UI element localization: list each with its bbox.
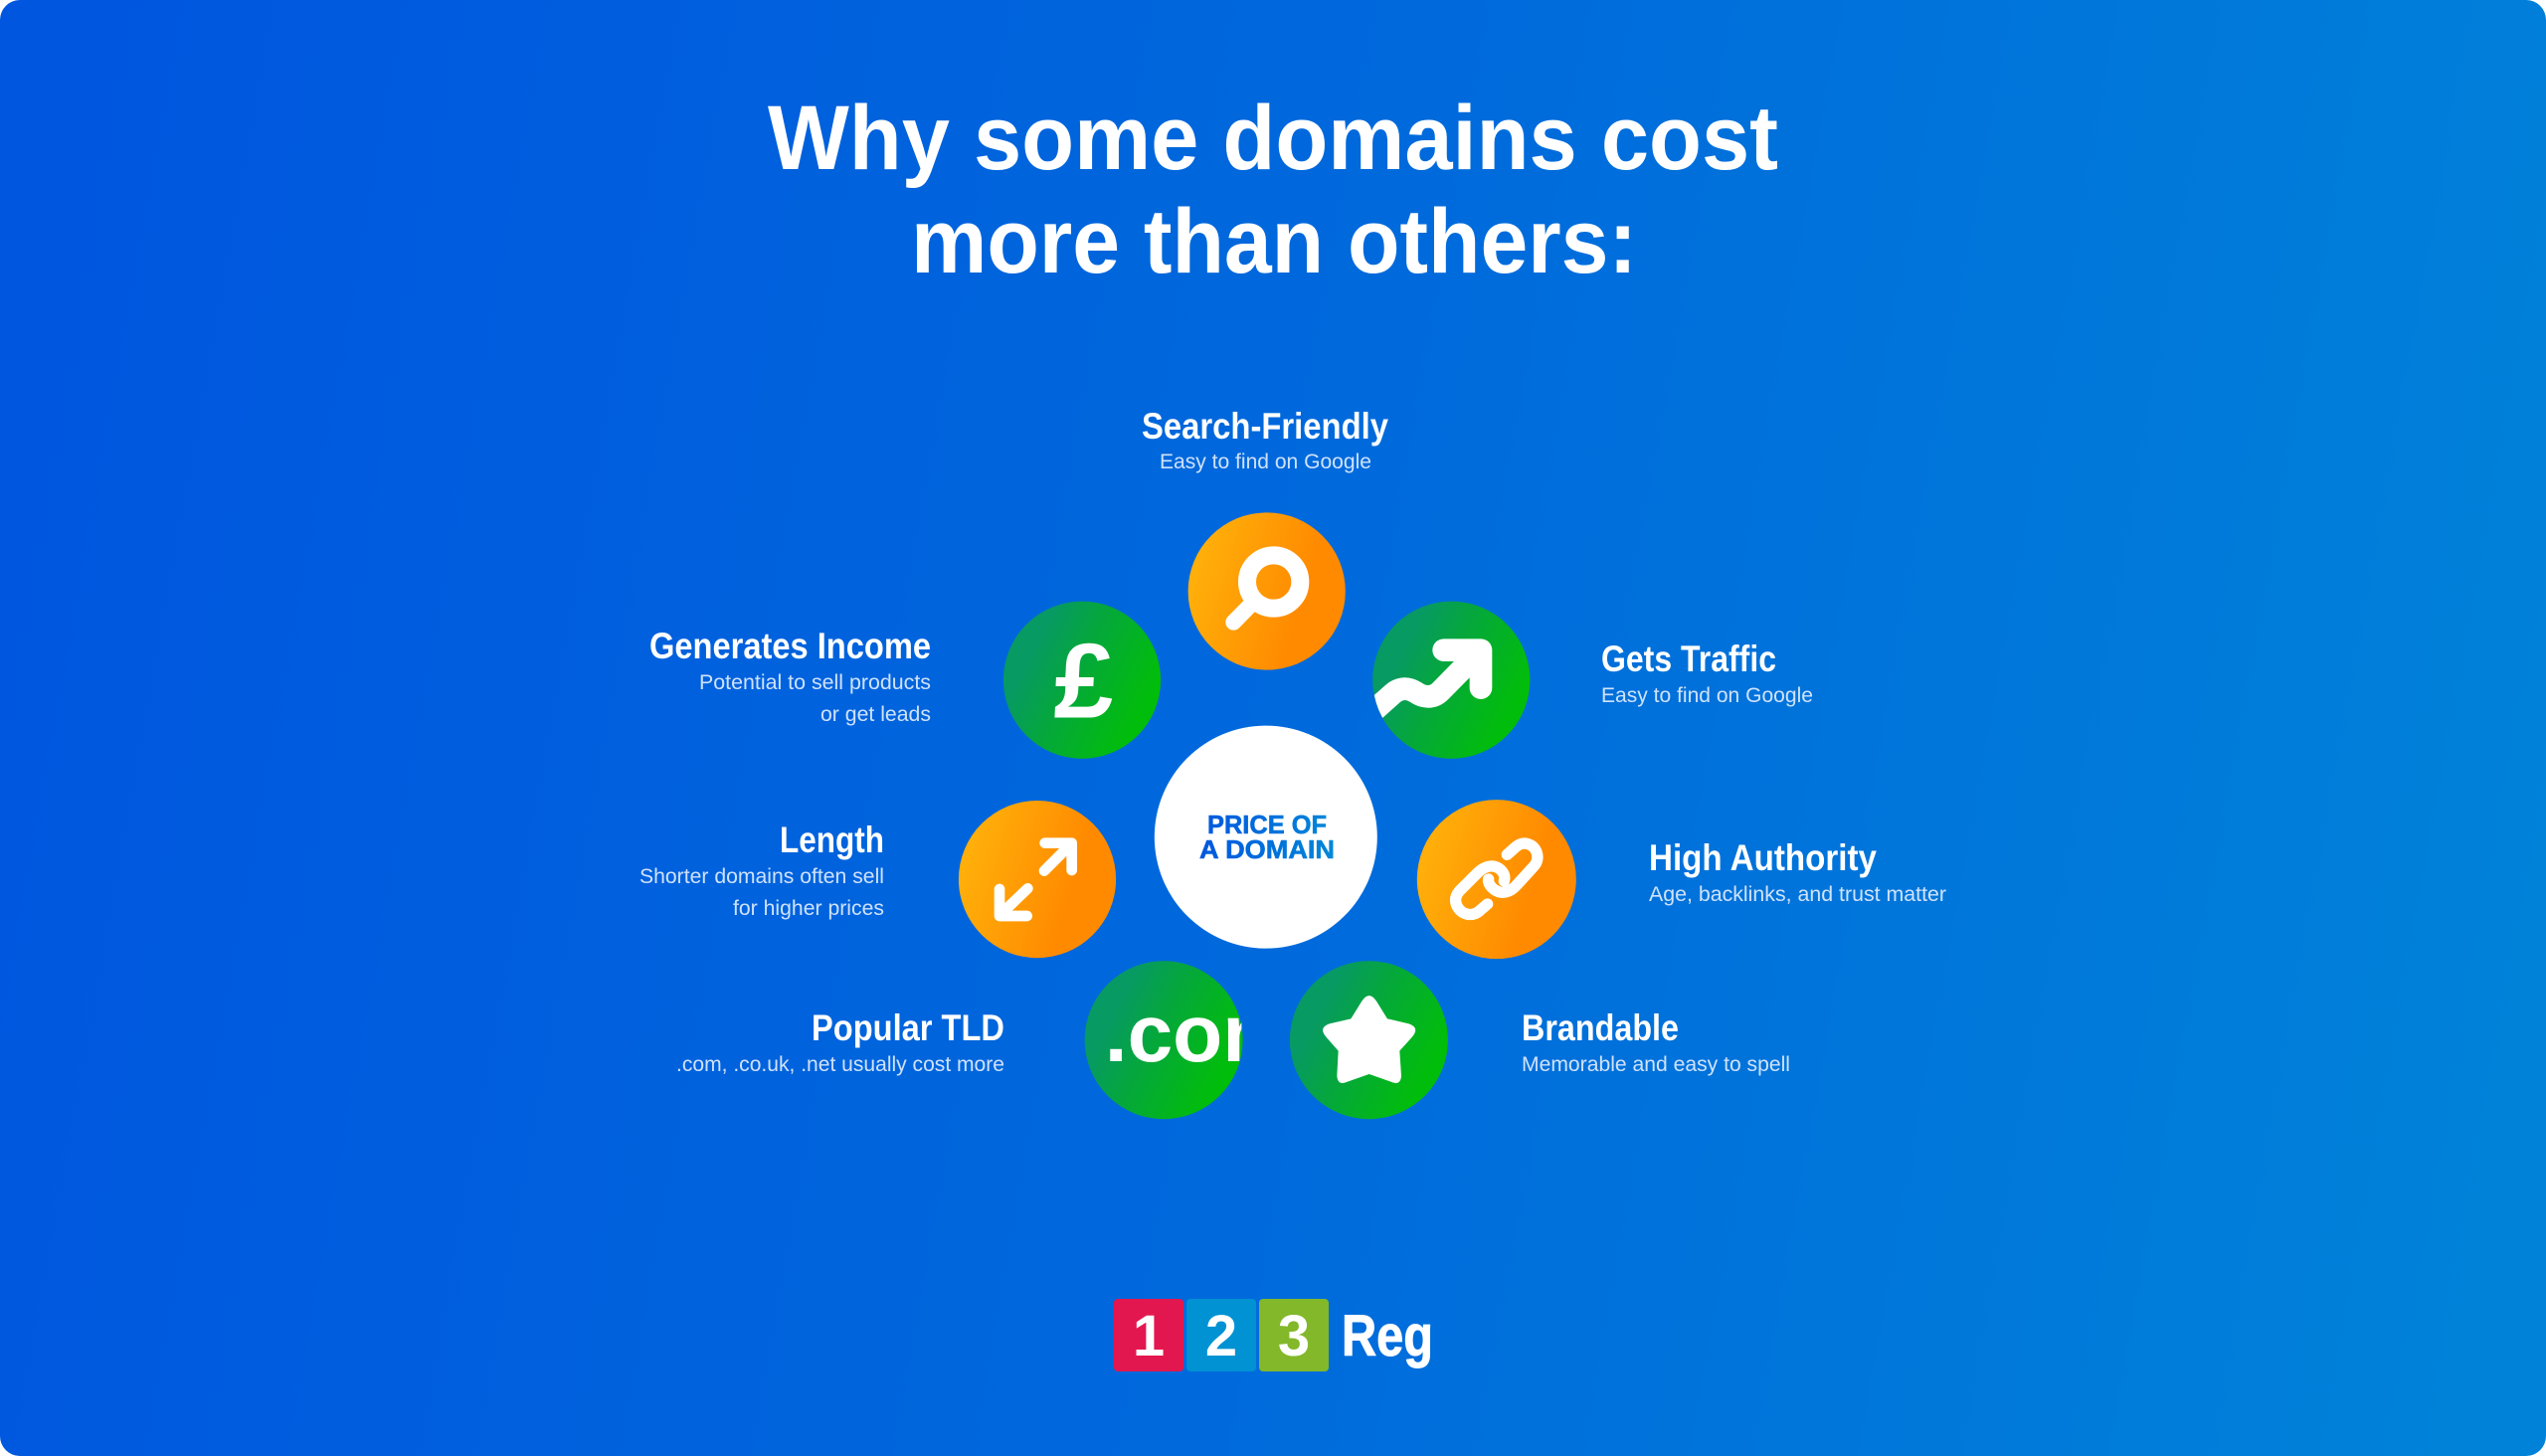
label: Generates Income: or get leads <box>820 703 931 726</box>
label: High Authority: Age, backlinks, and trust matter <box>1649 883 1946 906</box>
logo: 123 Reg: 2 <box>1205 1304 1237 1368</box>
centre circle: price of a domain <box>1155 726 1377 949</box>
centre circle: price of a domain: A DOMAIN <box>1199 834 1335 864</box>
icon: trending arrow <box>1365 602 1530 759</box>
logo: 123 Reg: 3 <box>1278 1304 1310 1368</box>
label: Generates Income: Potential to sell products <box>699 671 931 694</box>
label: Search-Friendly: Easy to find on Google <box>1160 451 1371 473</box>
label: Gets Traffic: Gets Traffic <box>1601 638 1776 679</box>
logo: 123 Reg <box>1114 1299 1433 1371</box>
icon: .com: .com <box>1105 989 1295 1079</box>
logo: 123 Reg: Reg <box>1342 1304 1433 1368</box>
icon: magnifying glass <box>1188 512 1346 670</box>
icon: pound sign <box>1003 602 1161 759</box>
icon: star <box>1290 961 1448 1119</box>
logo: 123 Reg: 1 <box>1133 1304 1165 1368</box>
label: Popular TLD <box>676 1007 1004 1076</box>
label: Search-Friendly <box>1142 406 1388 473</box>
label: High Authority <box>1649 837 1946 906</box>
label: Brandable <box>1522 1007 1790 1076</box>
label: Gets Traffic: Easy to find on Google <box>1601 684 1813 707</box>
label: Length <box>639 819 884 920</box>
label: Popular TLD: Popular TLD <box>812 1007 1004 1048</box>
icon: .com <box>1084 961 1243 1120</box>
label: High Authority: High Authority <box>1649 837 1877 878</box>
label: Length: Shorter domains often sell <box>639 865 884 888</box>
label: Generates Income <box>649 626 931 726</box>
label: Popular TLD: .com, .co.uk, .net usually cost more <box>676 1053 1004 1076</box>
label: Search-Friendly: Search-Friendly <box>1142 406 1388 447</box>
icon: chain link <box>1417 800 1576 959</box>
icon: pound sign: £ <box>1052 622 1117 740</box>
title <box>768 88 1778 292</box>
label: Brandable: Memorable and easy to spell <box>1522 1053 1790 1076</box>
centre circle: price of a domain: PRICE OF <box>1207 810 1327 839</box>
icon: resize arrows <box>959 801 1116 958</box>
label: Gets Traffic <box>1601 638 1813 707</box>
label: Length: Length <box>780 819 884 860</box>
label: Brandable: Brandable <box>1522 1007 1679 1048</box>
label: Length: for higher prices <box>733 897 884 920</box>
title: Why some domains cost <box>768 88 1778 189</box>
label: Generates Income: Generates Income <box>649 626 931 666</box>
title: more than others: <box>911 191 1637 292</box>
